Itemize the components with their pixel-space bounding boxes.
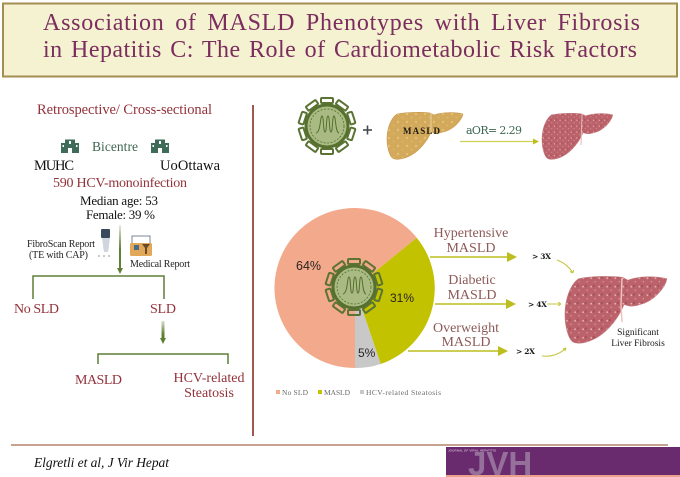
panel: phenotype risks — [408, 226, 667, 356]
phenotype: overweight MASLD — [433, 321, 499, 350]
title banner — [3, 4, 677, 76]
label: No SLD: No SLD — [14, 302, 59, 317]
slice labels: 31% — [390, 291, 414, 305]
pie chart — [274, 208, 441, 397]
bicentre label: Bicentre — [92, 139, 138, 154]
arrow: hypertensive — [430, 252, 517, 262]
journal banner — [446, 445, 680, 477]
legend: HCV-related Steatosis — [366, 388, 441, 397]
phenotype: diabetic MASLD: Diabetic — [448, 273, 496, 288]
adjusted odds ratio: aOR= 2.29 — [466, 124, 522, 137]
icon: medical report folder — [130, 236, 152, 256]
risk multipliers — [516, 252, 551, 356]
centre names — [34, 158, 221, 174]
icon: FibroScan device — [98, 229, 112, 256]
journal banner: JOURNAL OF VIRAL HEPATITIS — [448, 448, 496, 452]
phenotype: hypertensive MASLD: Hypertensive — [434, 226, 508, 241]
arrow: cohort to SLD split — [117, 225, 123, 274]
bracket: subtypes — [98, 354, 228, 364]
slice labels — [296, 259, 414, 360]
phenotype: diabetic MASLD — [447, 273, 497, 303]
arrow: overweight — [408, 346, 508, 356]
outcome label: Significant — [617, 327, 659, 338]
slice labels: 64% — [296, 259, 321, 273]
bracket: No SLD and SLD — [33, 276, 164, 299]
panel: main result — [299, 98, 613, 159]
fibroscan label: (TE with CAP) — [29, 250, 88, 261]
icon: fibrotic liver large — [565, 276, 667, 343]
phenotype: hypertensive MASLD — [434, 226, 508, 256]
legend — [276, 388, 441, 397]
outcome label: Liver Fibrosis — [611, 339, 665, 349]
risk multipliers: > 3X — [532, 252, 551, 261]
label: HCV-related steatosis — [173, 371, 245, 401]
outcome label — [611, 327, 665, 349]
risk multipliers: > 4X — [528, 300, 547, 309]
icon: fibrotic liver top — [542, 113, 613, 159]
icon: virus at pie centre — [326, 259, 382, 315]
label: HCV-related steatosis: Steatosis — [184, 386, 234, 401]
medical report label: Medical Report — [130, 259, 190, 270]
legend: MASLD — [324, 388, 351, 397]
fibroscan label: FibroScan Report — [27, 239, 95, 250]
slice: HCV-related steatosis 5% — [355, 288, 381, 368]
phenotype: overweight MASLD: MASLD — [441, 335, 491, 350]
slice: No SLD 64% — [274, 208, 417, 368]
icon: right hospital — [151, 140, 169, 153]
slice: MASLD 31% — [355, 238, 435, 364]
demographics — [80, 193, 158, 222]
phenotype: hypertensive MASLD: MASLD — [446, 241, 496, 256]
heading: study type: Retrospective/ Cross-sectional — [37, 102, 212, 118]
icon: fatty liver with MASLD label: MASLD — [403, 126, 440, 136]
fibroscan label — [27, 239, 95, 261]
demographics: Median age: 53 — [80, 193, 158, 208]
centre names: UoOttawa — [160, 158, 221, 174]
arrow: SLD to subtypes — [160, 321, 166, 344]
risk multipliers: > 2X — [516, 347, 535, 356]
label: HCV-related steatosis: HCV-related — [173, 371, 245, 386]
title banner: in Hepatitis C: The Role of Cardiometabolic Risk Factors — [43, 37, 637, 63]
label: MASLD: MASLD — [75, 373, 122, 388]
legend: No SLD — [282, 388, 309, 397]
plus sign — [363, 126, 372, 134]
vertical divider — [252, 105, 254, 436]
bottom rule — [11, 444, 668, 446]
curved arrows to liver — [542, 260, 574, 356]
icon: hepatitis C virus — [299, 98, 355, 154]
citation: Elgretli et al, J Vir Hepat — [33, 455, 170, 470]
cohort size: 590 HCV-monoinfection — [53, 176, 187, 191]
arrow: diabetic — [435, 299, 516, 309]
demographics: Female: 39 % — [86, 207, 155, 222]
phenotype: overweight MASLD: Overweight — [433, 321, 499, 336]
icon: fatty liver with MASLD label — [387, 112, 463, 159]
label: SLD: SLD — [150, 302, 176, 317]
arrow: to fibrotic liver — [460, 138, 539, 144]
panel: study design — [14, 102, 245, 401]
centre names: MUHC — [34, 158, 74, 174]
icon: left hospital — [61, 140, 79, 153]
phenotype: diabetic MASLD: MASLD — [447, 288, 497, 303]
slice labels: 5% — [358, 346, 376, 360]
title banner: Association of MASLD Phenotypes with Liver Fibrosis — [43, 10, 640, 36]
